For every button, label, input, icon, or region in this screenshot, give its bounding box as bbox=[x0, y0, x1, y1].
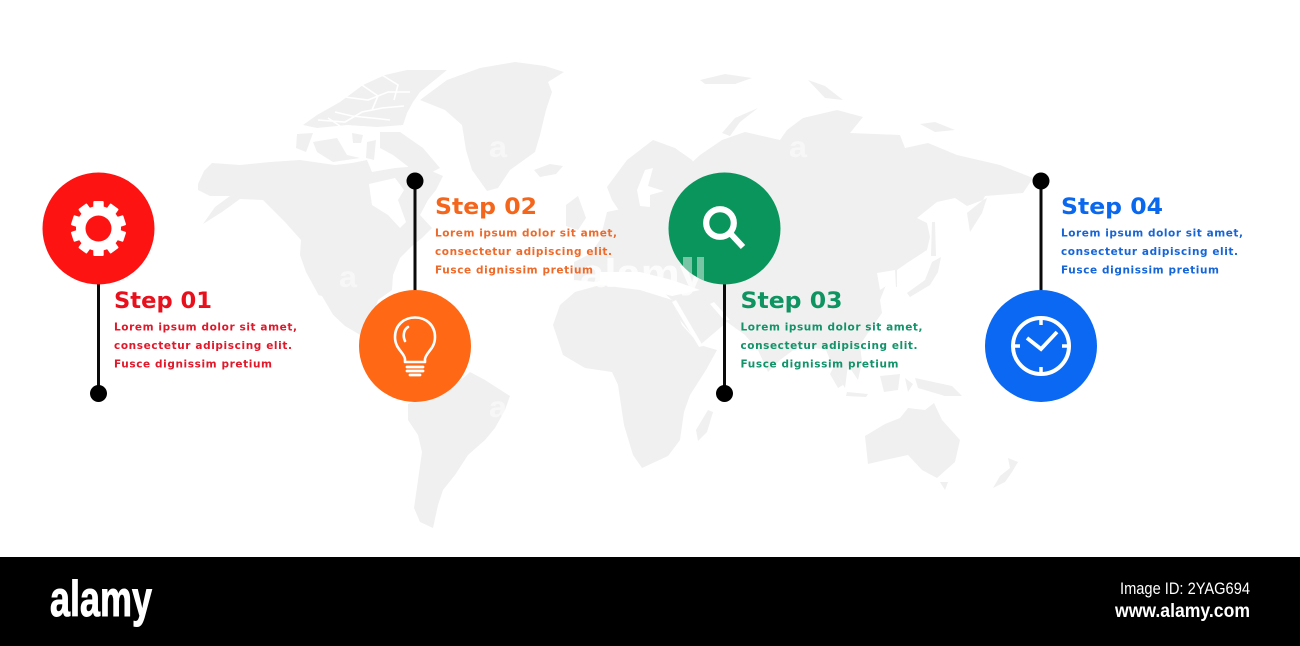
description: consectetur adipiscing elit. bbox=[1061, 246, 1238, 258]
heading: Step 03 bbox=[740, 289, 842, 314]
connector line bbox=[97, 270, 100, 393]
Kamchatka bbox=[967, 198, 987, 232]
Tasmania bbox=[940, 482, 948, 490]
Scandinavia bbox=[607, 140, 700, 212]
arctic channels bbox=[318, 75, 410, 126]
image id: Image ID: 2YAG694 bbox=[1120, 579, 1250, 598]
description: Fusce dignissim pretium bbox=[114, 358, 272, 370]
icon: gear bbox=[71, 201, 126, 256]
Banks Island bbox=[296, 133, 313, 152]
watermark letter: a bbox=[489, 131, 507, 164]
Madagascar bbox=[696, 410, 713, 441]
South America bbox=[408, 372, 510, 528]
United Kingdom bbox=[566, 196, 586, 230]
Yellow Sea bbox=[877, 270, 896, 290]
description: consectetur adipiscing elit. bbox=[435, 246, 612, 258]
Boothia bbox=[366, 140, 376, 160]
Baltic bbox=[637, 168, 664, 207]
description bbox=[114, 322, 297, 370]
description: Lorem ipsum dolor sit amet, bbox=[1061, 228, 1243, 240]
Gulf of California bbox=[318, 295, 335, 318]
heading: Step 02 bbox=[435, 195, 537, 220]
Canadian arctic islands bbox=[303, 70, 447, 128]
description: Lorem ipsum dolor sit amet, bbox=[740, 322, 922, 334]
heading: Step 04 bbox=[1061, 195, 1163, 220]
icon: clock bbox=[1013, 318, 1069, 374]
Hudson Bay bbox=[369, 178, 406, 228]
description: consectetur adipiscing elit. bbox=[114, 340, 292, 352]
description: consectetur adipiscing elit. bbox=[740, 340, 918, 352]
watermark letter: a bbox=[339, 261, 357, 294]
end dot bbox=[406, 172, 424, 190]
description bbox=[435, 228, 617, 276]
icon: light bulb bbox=[395, 318, 435, 375]
Indonesia bbox=[830, 368, 962, 397]
end dot bbox=[1032, 172, 1050, 190]
Japan bbox=[907, 257, 941, 297]
icon: magnifying glass bbox=[706, 209, 743, 247]
connector line bbox=[414, 181, 416, 300]
description bbox=[1061, 228, 1243, 276]
orange circle bbox=[359, 290, 471, 402]
stock watermark bbox=[339, 131, 807, 424]
Persian Gulf bbox=[710, 302, 730, 320]
description: Lorem ipsum dolor sit amet, bbox=[114, 322, 297, 334]
website: www.alamy.com bbox=[1114, 601, 1250, 622]
Greenland bbox=[420, 62, 564, 191]
Sakhalin bbox=[931, 222, 936, 256]
footer bar bbox=[0, 557, 1300, 646]
Africa bbox=[553, 285, 717, 468]
end dot bbox=[716, 385, 733, 402]
description: Fusce dignissim pretium bbox=[1061, 264, 1219, 276]
inland seas and bays bbox=[318, 168, 896, 347]
description: Fusce dignissim pretium bbox=[435, 264, 593, 276]
New Zealand bbox=[993, 458, 1018, 488]
Baffin Island bbox=[380, 132, 440, 172]
description bbox=[740, 322, 922, 370]
heading: Step 01 bbox=[114, 289, 212, 314]
watermark letter: a bbox=[789, 131, 807, 164]
world map background bbox=[198, 62, 1033, 528]
Iceland bbox=[534, 164, 563, 177]
watermark over circle bbox=[683, 257, 704, 280]
Red Sea bbox=[672, 300, 703, 347]
end dot bbox=[90, 385, 107, 402]
Eurasia bbox=[574, 110, 1033, 388]
North America bbox=[198, 160, 443, 336]
description: Lorem ipsum dolor sit amet, bbox=[435, 228, 617, 240]
Mediterranean bbox=[600, 272, 700, 296]
red circle bbox=[42, 172, 154, 284]
connector line bbox=[1040, 181, 1042, 300]
description: Fusce dignissim pretium bbox=[740, 358, 899, 370]
green circle bbox=[668, 172, 780, 284]
watermark word: alamy bbox=[580, 252, 705, 296]
Victoria Island bbox=[313, 138, 360, 162]
step 03 bbox=[668, 172, 922, 402]
Arctic Russia islands bbox=[700, 74, 955, 136]
Australia bbox=[865, 403, 960, 478]
step 04 bbox=[985, 172, 1243, 402]
step 02 bbox=[359, 172, 617, 402]
connector line bbox=[723, 270, 726, 393]
step 01 bbox=[42, 172, 297, 402]
watermark letter: a bbox=[489, 391, 507, 424]
blue circle bbox=[985, 290, 1097, 402]
Somerset Island bbox=[352, 133, 363, 143]
alamy logo: alamy bbox=[50, 571, 152, 627]
